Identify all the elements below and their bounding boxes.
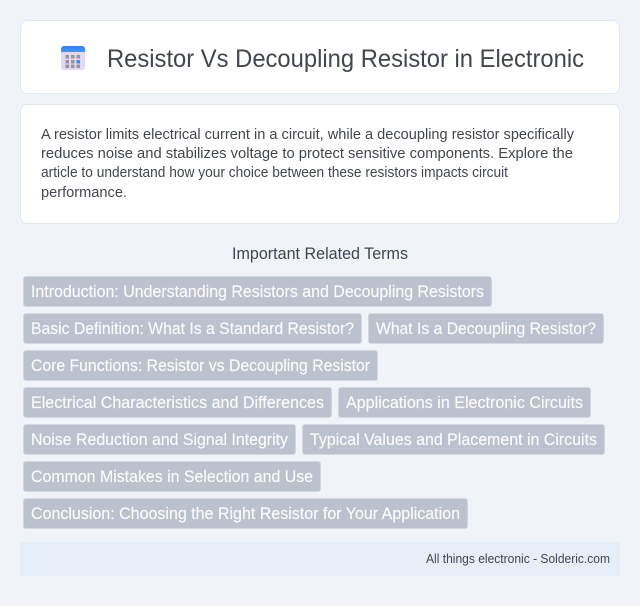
description text: article to understand how your choice between these resistors impacts circuit [41,165,508,181]
tag: electrical characteristics: Electrical Characteristics and Differences [31,394,324,412]
tag: conclusion: Conclusion: Choosing the Right Resistor for Your Application [31,505,460,523]
tag: core functions: Core Functions: Resistor vs Decoupling Resistor [31,357,370,375]
tag: typical values [302,424,604,454]
tag: decoupling resistor: What Is a Decoupling Resistor? [376,320,596,338]
description text: performance. [41,185,127,201]
tag: noise reduction: Noise Reduction and Signal Integrity [31,431,289,449]
header panel [20,20,620,94]
description text: reduces noise and stabilizes voltage to protect sensitive components. Explore the [41,146,573,162]
title: Resistor Vs Decoupling Resistor in Electronic [107,45,584,73]
tag: decoupling resistor [368,314,604,344]
footer bar [20,542,620,576]
tag: introduction [24,276,492,306]
tag: common mistakes: Common Mistakes in Selection and Use [31,468,313,486]
tag: noise reduction [24,424,296,454]
tag: applications [338,388,590,418]
tag: introduction: Introduction: Understanding Resistors and Decoupling Resistors [31,283,484,301]
panel: description [20,104,620,224]
tag: conclusion [24,498,468,528]
description text [41,127,575,201]
related terms tags [24,276,604,528]
footer credit: All things electronic - Solderic.com [426,552,610,566]
heading: related terms: Important Related Terms [232,245,408,263]
tag: applications: Applications in Electronic Circuits [346,394,583,412]
tag: core functions [24,350,378,380]
description text: A resistor limits electrical current in a circuit, while a decoupling resistor specifically [41,127,575,143]
tag: electrical characteristics [24,388,332,418]
tag: basic definition [24,314,362,344]
tag: typical values: Typical Values and Placement in Circuits [310,431,597,449]
tag: basic definition: Basic Definition: What Is a Standard Resistor? [31,320,354,338]
icon: calendar grid [61,46,85,70]
tag: common mistakes [24,462,320,492]
